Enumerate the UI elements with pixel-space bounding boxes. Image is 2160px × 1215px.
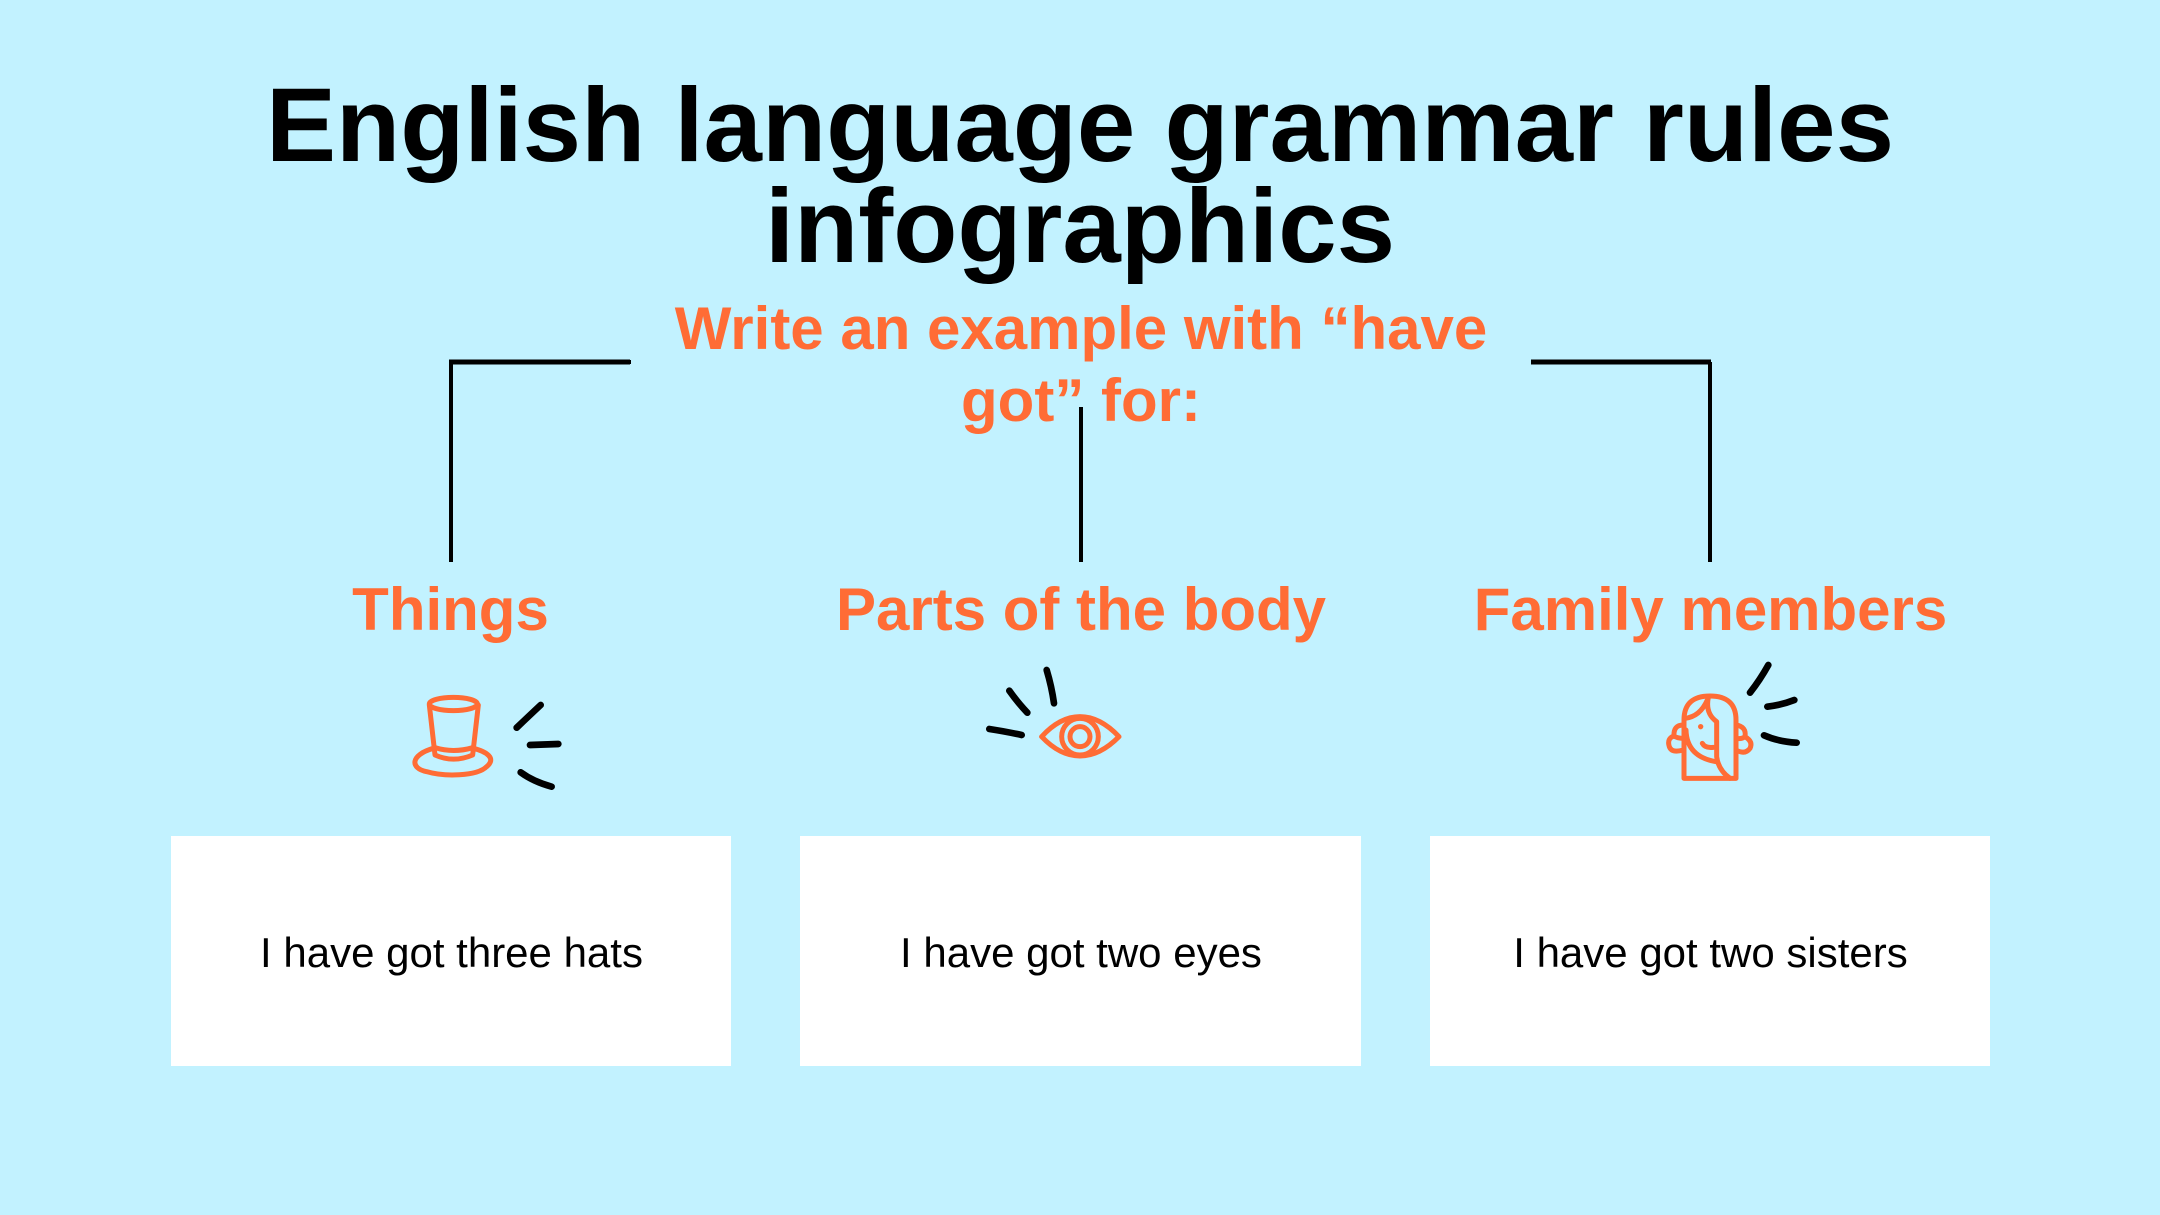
icon: top hat: [412, 694, 562, 790]
panel: things example: [171, 836, 731, 1066]
subtitle: got” for:: [961, 367, 1201, 434]
icon: eye: [986, 666, 1122, 758]
text: things example: I have got three hats: [260, 929, 643, 976]
text: family example: I have got two sisters: [1513, 929, 1908, 976]
title: infographics: [765, 168, 1395, 285]
title: [266, 67, 1894, 285]
heading: things: Things: [352, 576, 549, 643]
heading: parts of the body: Parts of the body: [836, 576, 1326, 643]
heading: family members: Family members: [1474, 576, 1947, 643]
icon: woman: [1666, 662, 1800, 781]
subtitle: Write an example with “have: [675, 295, 1487, 362]
text: body example: I have got two eyes: [900, 929, 1262, 976]
panel: body example: [800, 836, 1361, 1066]
subtitle: [674, 295, 1487, 434]
panel: family example: [1430, 836, 1990, 1066]
title: English language grammar rules: [266, 67, 1894, 184]
